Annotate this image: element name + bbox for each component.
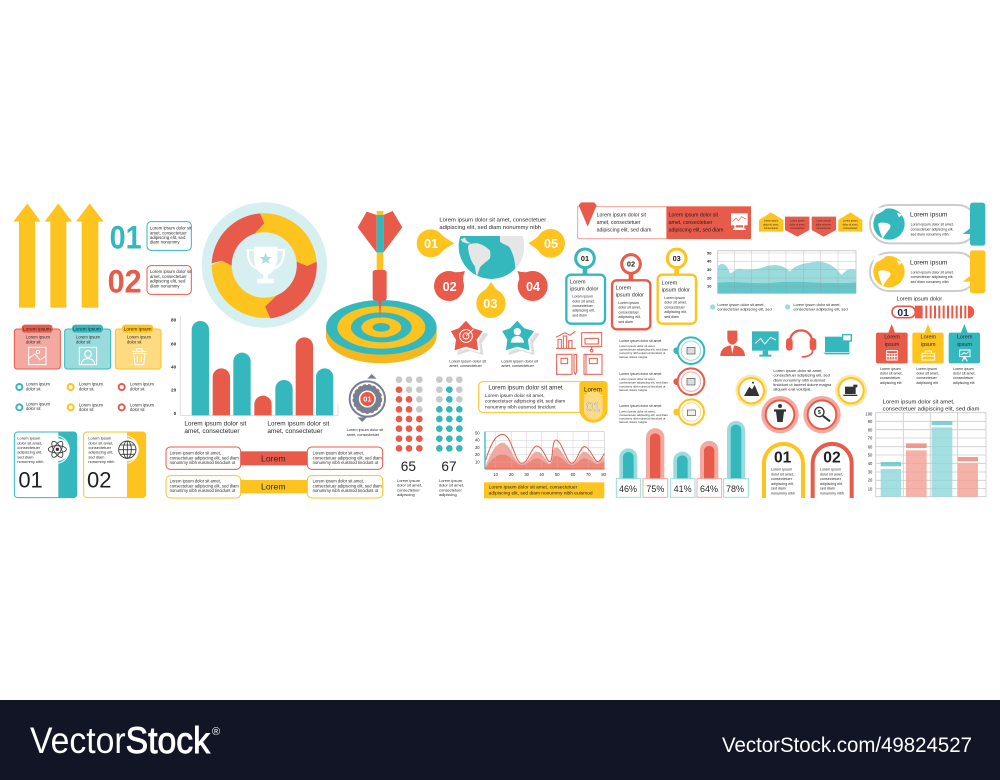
bar chart: gridded column chart: 40 <box>868 461 873 466</box>
numbered notes 01 and 02 <box>108 220 192 299</box>
dot matrix: 67 <box>436 376 464 497</box>
panel: yellow globe pill: consectetuer adipiscing elit, <box>911 275 953 279</box>
area chart: red waves: 30 <box>524 472 530 477</box>
panel: red Lorem connector row: Lorem ipsum dolor sit amet, <box>170 451 221 456</box>
panel: three colored icon cards: Lorem ipsum <box>953 367 974 371</box>
dot matrix: 65: 65 <box>401 459 416 474</box>
list item: red ring <box>619 368 704 395</box>
pin card 03: adipiscing elit, <box>664 310 687 314</box>
pin card 03: 03 <box>673 254 681 263</box>
globe with five numbered callouts: 03 <box>483 297 497 311</box>
banner: two-part header with dart marker <box>578 202 751 239</box>
banner: two-part header with dart marker: Lorem ipsum dolor sit <box>669 213 719 219</box>
tags: four small pentagon labels: dolor sit amet, <box>790 223 805 226</box>
numbered notes 01 and 02: amet, consectetuer <box>150 274 187 279</box>
legend: six ring bullets: Lorem ipsum <box>79 402 104 407</box>
legend: six ring bullets: dolor sit <box>130 386 145 391</box>
panel: teal globe pill: Lorem ipsum dolor sit amet, <box>911 223 954 227</box>
panel: three colored icon cards: dolor sit amet, <box>953 372 975 376</box>
panel: three tabbed cards: Lorem ipsum <box>76 335 101 340</box>
gear with number 01: amet, consectetuer <box>347 433 380 437</box>
callout: Lorem badge 01: Lorem ipsum dolor sit amet <box>488 384 563 391</box>
panel: red Lorem connector row: Lorem ipsum dolor sit amet, <box>313 451 364 456</box>
tags: four small pentagon labels: Lorem ipsum <box>790 220 805 223</box>
tags: four small pentagon labels: consectetuer <box>817 227 831 230</box>
arch card 02 <box>813 444 852 498</box>
bar chart: percentage pills: 46% <box>619 484 637 494</box>
panel: three colored icon cards: consectetuer <box>953 376 974 380</box>
arch card 01: nonummy nibh <box>771 491 795 495</box>
area chart: teal layers with legend: Lorem ipsum dolor sit amet, <box>717 303 765 307</box>
legend: six ring bullets: Lorem ipsum <box>26 382 51 387</box>
star badge: person icon <box>501 319 540 368</box>
arch card 01: sed diam <box>771 487 786 491</box>
star badge: person icon: amet, consectetuer <box>501 364 535 368</box>
arrows: three yellow up arrows <box>13 203 104 308</box>
icon: trophy <box>248 247 284 283</box>
legend: six ring bullets: dolor sit <box>130 407 145 412</box>
bar chart: gridded column chart: consectetuer adipiscing elit, sed diam <box>883 407 980 413</box>
legend: six ring bullets: dolor sit <box>79 407 94 412</box>
bar chart: percentage pills: 41% <box>674 484 692 494</box>
star badge: target icon <box>449 319 488 368</box>
bar chart: seven rounded bars: amet, consectetuer <box>184 428 240 435</box>
bar chart: seven rounded bars: 80 <box>171 317 177 322</box>
panel: card 01 with atom icon: 01 <box>18 467 43 492</box>
panel: yellow Lorem connector row: nonummy nibh euismod tincidunt ut <box>170 488 236 493</box>
numbered notes 01 and 02: amet, consectetuer <box>150 230 187 235</box>
tags: four small pentagon labels: Lorem ipsum <box>816 220 831 223</box>
globe with five numbered callouts: 02 <box>443 280 457 294</box>
icons: red line charts and notebooks <box>556 331 602 374</box>
numbered notes 01 and 02: Lorem ipsum dolor sit <box>150 269 192 274</box>
numbered notes 01 and 02: adipiscing elit, sed <box>150 235 186 240</box>
panel: yellow Lorem connector row: nonummy nibh euismod tincidunt ut <box>313 488 379 493</box>
callout: four circular icons with text: consectetuer adipiscing elit, sed <box>773 373 830 378</box>
tags: four small pentagon labels: dolor sit amet, <box>843 223 858 226</box>
panel: card 02 with globe icon <box>84 432 146 498</box>
tags: four small pentagon labels: consectetuer <box>843 227 858 230</box>
banner: two-part header with dart marker: adipiscing elit, sed diam <box>597 227 651 233</box>
pin card 03: dolor sit amet, <box>664 301 687 305</box>
donut chart with trophy <box>202 202 327 328</box>
panel: three colored icon cards: Lorem <box>884 335 900 341</box>
pin card 01: 01 <box>581 254 589 263</box>
panel: card 01 with atom icon: dolor sit amet, <box>17 440 42 445</box>
list item: yellow ring: Lorem ipsum dolor sit amet <box>619 404 661 408</box>
callout: Lorem badge 01: nonummy nibh euismod tincidunt <box>485 405 556 411</box>
panel: card 01 with atom icon: consectetuer <box>17 445 41 450</box>
dot matrix: 67: Lorem ipsum <box>439 478 463 483</box>
list item: red ring: Lorem ipsum dolor sit amet, <box>619 377 656 381</box>
bar chart: seven rounded bars: 0 <box>174 411 177 416</box>
pin card 02: consectetuer <box>618 310 640 314</box>
pin card 02: Lorem <box>616 285 632 291</box>
arch card 02: dolor sit amet, <box>820 472 843 476</box>
area chart: red waves: 20 <box>475 452 480 457</box>
panel: teal globe pill: Lorem ipsum <box>910 212 947 219</box>
pin card 02: adipiscing elit, <box>618 315 641 319</box>
pin card 01: consectetuer <box>572 304 594 308</box>
arch card 02: nonummy nibh <box>820 491 844 495</box>
area chart: red waves: 70 <box>586 472 591 477</box>
callout: four circular icons with text: aliquam erat volutpat. <box>773 387 811 392</box>
list item: teal ring: consectetuer adipiscing elit, sed diam <box>619 347 668 351</box>
panel: teal globe pill: consectetuer adipiscing elit, <box>911 227 953 231</box>
list item: yellow ring: consectetuer adipiscing elit, sed diam <box>619 413 668 417</box>
panel: yellow globe pill: sed diam nonummy nibh <box>911 280 949 284</box>
bar chart: seven rounded bars: amet, consectetuer <box>267 428 323 435</box>
pin card 02: dolor sit amet, <box>618 306 641 310</box>
numbered notes 01 and 02: diam nonummy <box>150 240 180 245</box>
bar chart: seven rounded bars: Lorem ipsum dolor sit <box>267 421 330 428</box>
area chart: red waves: adipiscing elit, sed diam nonummy nibh euismod <box>489 491 593 497</box>
footer: VectorStock bar <box>0 700 1000 780</box>
list item: yellow ring: Lorem ipsum dolor sit amet, <box>619 409 656 413</box>
panel: three colored icon cards: Lorem ipsum <box>916 367 937 371</box>
list item: red ring: Lorem ipsum dolor sit amet <box>619 372 661 376</box>
panel: teal globe pill <box>870 203 985 246</box>
globe with five numbered callouts: 04 <box>526 280 540 294</box>
dot matrix: 67: dolor sit amet, <box>439 483 464 488</box>
panel: three tabbed cards: Lorem ipsum <box>124 326 152 332</box>
pin card 03: Lorem ipsum <box>664 296 685 300</box>
panel: three colored icon cards: Lorem ipsum <box>880 367 901 371</box>
tags: four small pentagon labels <box>759 212 862 237</box>
footer: VectorStock bar: VectorStock <box>30 720 210 761</box>
star badge: target icon: Lorem ipsum dolor sit <box>449 359 487 363</box>
arch card 02: sed diam <box>820 487 835 491</box>
panel: yellow globe pill <box>870 250 985 293</box>
progress pill 01 <box>892 297 974 319</box>
dot matrix: 65: dolor sit amet, <box>397 483 422 488</box>
bar chart: seven rounded bars <box>171 316 338 435</box>
panel: card 02 with globe icon: adipiscing elit, <box>88 450 113 455</box>
pin card 02: 02 <box>627 260 635 269</box>
numbered notes 01 and 02: Lorem ipsum dolor sit <box>150 225 192 230</box>
area chart: teal layers with legend <box>707 250 856 312</box>
legend: six ring bullets: Lorem ipsum <box>130 402 155 407</box>
pin card 03 <box>658 249 696 324</box>
panel: three colored icon cards: Lorem <box>957 335 973 341</box>
callout: Lorem badge 01: 01 <box>586 399 600 414</box>
bar chart: gridded column chart: 80 <box>868 427 873 432</box>
panel: yellow globe pill: Lorem ipsum <box>910 260 947 267</box>
arch card 02: adipiscing elit, <box>820 482 843 486</box>
pin card 03: ipsum dolor <box>662 288 690 294</box>
panel: three colored icon cards: adipiscing elit <box>916 381 938 385</box>
panel: three tabbed cards: Lorem ipsum <box>23 326 51 332</box>
panel: three tabbed cards: Lorem ipsum <box>26 335 51 340</box>
panel: card 02 with globe icon: dolor sit amet, <box>88 440 113 445</box>
gear with number 01: 01 <box>363 395 371 404</box>
bar chart: gridded column chart: 20 <box>868 478 873 483</box>
arch card 01: consectetuer <box>771 477 793 481</box>
tags: four small pentagon labels: consectetuer <box>790 227 805 230</box>
icon: dart and target <box>326 211 437 363</box>
panel: card 01 with atom icon: Lorem ipsum <box>17 436 41 441</box>
panel: three colored icon cards: ipsum <box>885 342 900 348</box>
legend: six ring bullets: Lorem ipsum <box>79 382 104 387</box>
bar chart: seven rounded bars: 40 <box>171 364 177 369</box>
pin card 01 <box>566 249 605 324</box>
list item: yellow ring: laoreet dolore magna <box>619 420 647 424</box>
arch card 01: 01 <box>774 449 792 466</box>
panel: card 02 with globe icon: 02 <box>87 467 111 492</box>
tags: four small pentagon labels: Lorem ipsum <box>843 220 858 223</box>
panel: yellow globe pill: Lorem ipsum dolor sit amet, <box>911 270 954 274</box>
globe with five numbered callouts: Lorem ipsum dolor sit amet, consectetuer <box>439 218 546 224</box>
panel: red Lorem connector row: Lorem <box>261 453 286 463</box>
area chart: red waves: 10 <box>475 459 480 464</box>
area chart: red waves: 80 <box>601 472 607 477</box>
pin card 01: ipsum dolor <box>570 286 599 292</box>
panel: card 02 with globe icon: nonummy nibh <box>88 459 114 464</box>
area chart: red waves: 50 <box>475 430 480 435</box>
globe with five numbered callouts <box>417 218 565 318</box>
panel: three colored icon cards: consectetuer <box>916 376 938 380</box>
legend: six ring bullets: dolor sit <box>26 386 41 391</box>
panel: three colored icon cards: dolor sit amet, <box>916 372 939 376</box>
globe with five numbered callouts: 05 <box>544 237 558 251</box>
panel: red Lorem connector row: nonummy nibh euismod tincidunt ut <box>170 460 236 465</box>
bar chart: gridded column chart: 70 <box>868 436 873 441</box>
pin card 02: sed diam <box>618 320 633 324</box>
legend: six ring bullets <box>16 382 155 412</box>
pin card 01: sed diam <box>572 314 587 318</box>
numbered notes 01 and 02: adipiscing elit, sed <box>150 279 186 284</box>
bar chart: gridded column chart: 10 <box>868 486 873 491</box>
panel: three tabbed cards: dolor sit <box>26 340 41 345</box>
panel: red Lorem connector row: consectetuer adipiscing elit, sed diam <box>170 455 239 460</box>
pin card 02: ipsum dolor <box>616 293 644 299</box>
callout: Lorem badge 01: Lorem ipsum dolor sit amet, <box>485 393 545 399</box>
panel: three tabbed cards: dolor sit <box>76 340 91 345</box>
area chart: teal layers with legend: consectetuer adipiscing elit, sed <box>793 308 848 312</box>
legend: six ring bullets: Lorem ipsum <box>130 382 155 387</box>
banner: two-part header with dart marker: amet, consectetuer <box>669 220 713 226</box>
panel: three tabbed cards: dolor sit <box>127 340 142 345</box>
callout: Lorem badge 01: Lorem <box>584 387 602 394</box>
pin card 01: Lorem ipsum <box>572 295 593 299</box>
panel: three colored icon cards: Lorem <box>921 335 937 341</box>
callout: four circular icons with text: Lorem ipsum dolor sit amet, <box>773 368 823 373</box>
panel: red Lorem connector row: consectetuer adipiscing elit, sed diam <box>313 455 382 460</box>
gear with number 01 <box>347 374 385 437</box>
list item: yellow ring: nonummy nibh euismod tincidunt ut <box>619 416 665 420</box>
panel: red Lorem connector row: nonummy nibh euismod tincidunt ut <box>313 460 379 465</box>
numbered notes 01 and 02: 02 <box>108 263 142 299</box>
area chart: red waves: 10 <box>493 472 499 477</box>
bar chart: gridded column chart: Lorem ipsum dolor sit amet, <box>883 399 955 405</box>
bar chart: seven rounded bars: Lorem ipsum dolor sit <box>184 421 247 428</box>
banner: two-part header with dart marker: amet, consectetuer <box>597 220 641 226</box>
list item: red ring: consectetuer adipiscing elit, sed diam <box>619 381 668 385</box>
callout: Lorem badge 01: consectetuer adipiscing elit, sed diam <box>485 399 565 405</box>
callout: four circular icons with text <box>735 368 867 433</box>
dot matrix: 65: consectetuer <box>397 487 420 492</box>
pin card 03: Lorem <box>662 280 678 286</box>
pin card 02: Lorem ipsum <box>618 301 639 305</box>
bar chart: gridded column chart: 30 <box>868 469 873 474</box>
panel: three colored icon cards: dolor sit amet, <box>880 372 902 376</box>
area chart: red waves: 60 <box>571 472 576 477</box>
list item: red ring: laoreet dolore magna <box>619 388 647 392</box>
area chart: teal layers with legend: 40 <box>707 259 712 264</box>
area chart: teal layers with legend: 10 <box>707 284 712 289</box>
panel: three colored icon cards: adipiscing elit <box>953 381 974 385</box>
star badge: target icon: amet, consectetuer <box>449 364 483 368</box>
area chart: red waves: 40 <box>475 438 480 443</box>
panel: three colored icon cards: consectetuer <box>880 376 901 380</box>
list item: teal ring: Lorem ipsum dolor sit amet <box>619 339 661 343</box>
area chart: red waves: 30 <box>475 445 480 450</box>
area chart: red waves <box>475 430 607 498</box>
area chart: teal layers with legend: consectetuer adipiscing elit, sed <box>717 308 772 312</box>
pin card 03: sed diam <box>664 315 679 319</box>
area chart: teal layers with legend: 50 <box>707 250 712 255</box>
panel: card 02 with globe icon: sed diam <box>88 454 105 459</box>
tags: four small pentagon labels: consectetuer <box>764 227 778 230</box>
panel: yellow Lorem connector row <box>166 476 383 498</box>
pin card 01: adipiscing elit, <box>572 309 595 313</box>
panel: three colored icon cards: ipsum <box>957 342 972 348</box>
callout: four circular icons with text: diam nonummy nibh euismod <box>773 377 825 382</box>
arch card 01: dolor sit amet, <box>771 472 794 476</box>
panel: yellow Lorem connector row: Lorem ipsum dolor sit amet, <box>170 479 221 484</box>
panel: card 01 with atom icon: nonummy nibh <box>17 459 43 464</box>
panel: yellow Lorem connector row: Lorem ipsum dolor sit amet, <box>313 479 364 484</box>
dot matrix: 65: adipiscing <box>397 492 415 497</box>
star badge: person icon: Lorem ipsum dolor sit <box>501 359 539 363</box>
arch card 01 <box>764 444 803 498</box>
list item: teal ring: nonummy nibh euismod tincidunt ut <box>619 351 665 355</box>
banner: two-part header with dart marker: adipiscing elit, sed diam <box>669 227 723 233</box>
bar chart: percentage pills <box>616 421 748 497</box>
gear with number 01: Lorem ipsum dolor sit <box>347 428 384 432</box>
pin card 01: Lorem <box>570 280 586 286</box>
panel: three tabbed cards <box>14 325 161 369</box>
numbered notes 01 and 02: diam nonummy <box>150 283 180 288</box>
arch card 02: Lorem ipsum <box>820 468 841 472</box>
bar chart: gridded column chart: 100 <box>865 411 873 416</box>
bar chart: gridded column chart: 50 <box>868 453 873 458</box>
callout: four circular icons with text: tincidunt ut laoreet dolore magna <box>773 382 832 387</box>
bar chart: gridded column chart: 90 <box>868 419 873 424</box>
panel: red Lorem connector row <box>166 447 383 469</box>
panel: three colored icon cards <box>876 324 980 385</box>
panel: three colored icon cards: adipiscing elit <box>880 381 901 385</box>
bar chart: seven rounded bars: 20 <box>171 387 177 392</box>
pin card 02 <box>612 255 650 329</box>
arch card 01: adipiscing elit, <box>771 482 794 486</box>
pin card 03: consectetuer <box>664 305 686 309</box>
area chart: red waves: 20 <box>509 472 514 477</box>
panel: yellow Lorem connector row: consectetuer adipiscing elit, sed diam <box>170 483 239 488</box>
dot matrix: 67: adipiscing <box>439 492 457 497</box>
panel: card 01 with atom icon <box>14 432 77 498</box>
panel: card 02 with globe icon: consectetuer <box>88 445 112 450</box>
list item: teal ring <box>619 337 704 364</box>
bar chart: gridded column chart: 60 <box>868 444 873 449</box>
dot matrix: 65: Lorem ipsum <box>397 478 421 483</box>
bar chart: gridded column chart <box>865 399 986 497</box>
panel: yellow Lorem connector row: consectetuer adipiscing elit, sed diam <box>313 483 382 488</box>
globe with five numbered callouts: 01 <box>424 237 438 251</box>
panel: teal globe pill: sed diam nonummy nibh <box>911 232 949 236</box>
panel: card 01 with atom icon: adipiscing elit, <box>17 450 42 455</box>
area chart: teal layers with legend: 30 <box>707 267 712 272</box>
callout: Lorem badge 01 <box>479 381 608 423</box>
panel: yellow Lorem connector row: Lorem <box>261 481 286 491</box>
globe with five numbered callouts: adipiscing elit, sed diam nonummy nibh <box>439 225 541 231</box>
pin card 01: dolor sit amet, <box>572 299 595 303</box>
dot matrix: 65 <box>396 376 423 497</box>
area chart: red waves: 40 <box>539 472 545 477</box>
area chart: red waves: 50 <box>555 472 560 477</box>
list item: teal ring: Lorem ipsum dolor sit amet, <box>619 344 656 348</box>
legend: six ring bullets: dolor sit <box>26 406 41 411</box>
area chart: red waves: Lorem ipsum dolor sit amet, consectetuer <box>489 485 578 491</box>
footer: VectorStock bar: ® <box>212 726 220 738</box>
callout: four circular icons with text: $ <box>818 410 821 416</box>
panel: three colored icon cards: ipsum <box>921 342 936 348</box>
panel: card 02 with globe icon: Lorem ipsum <box>88 436 112 441</box>
bar chart: percentage pills: 75% <box>646 484 664 494</box>
tags: four small pentagon labels: dolor sit amet, <box>763 223 779 226</box>
list item: red ring: nonummy nibh euismod tincidunt ut <box>619 384 665 388</box>
list item: yellow ring <box>619 399 704 425</box>
tags: four small pentagon labels: dolor sit amet, <box>816 223 832 226</box>
arch card 02: 02 <box>823 449 841 466</box>
panel: three tabbed cards: Lorem ipsum <box>73 326 101 332</box>
arch card 01: Lorem ipsum <box>771 468 792 472</box>
numbered notes 01 and 02: 01 <box>110 220 142 256</box>
footer: VectorStock bar: VectorStock.com/49824527 <box>722 734 972 757</box>
progress pill 01: Lorem ipsum dolor <box>897 297 942 303</box>
icons row: person, monitor, headset, laptop <box>720 330 851 357</box>
panel: card 01 with atom icon: sed diam <box>17 454 34 459</box>
area chart: teal layers with legend: 20 <box>707 275 712 280</box>
legend: six ring bullets: Lorem ipsum <box>26 401 51 406</box>
progress pill 01: 01 <box>897 308 909 319</box>
arch card 02: consectetuer <box>820 477 842 481</box>
banner: two-part header with dart marker: Lorem ipsum dolor sit <box>597 213 647 219</box>
dot matrix: 67: 67 <box>441 459 457 474</box>
bar chart: seven rounded bars: 60 <box>171 342 177 347</box>
dot matrix: 67: consectetuer <box>439 487 462 492</box>
panel: three tabbed cards: Lorem ipsum <box>127 335 152 340</box>
list item: teal ring: laoreet dolore magna <box>619 355 647 359</box>
bar chart: percentage pills: 78% <box>726 484 744 494</box>
bar chart: percentage pills: 64% <box>700 484 718 494</box>
area chart: teal layers with legend: Lorem ipsum dolor sit amet, <box>793 303 841 307</box>
tags: four small pentagon labels: Lorem ipsum <box>764 220 778 223</box>
legend: six ring bullets: dolor sit <box>79 386 94 391</box>
